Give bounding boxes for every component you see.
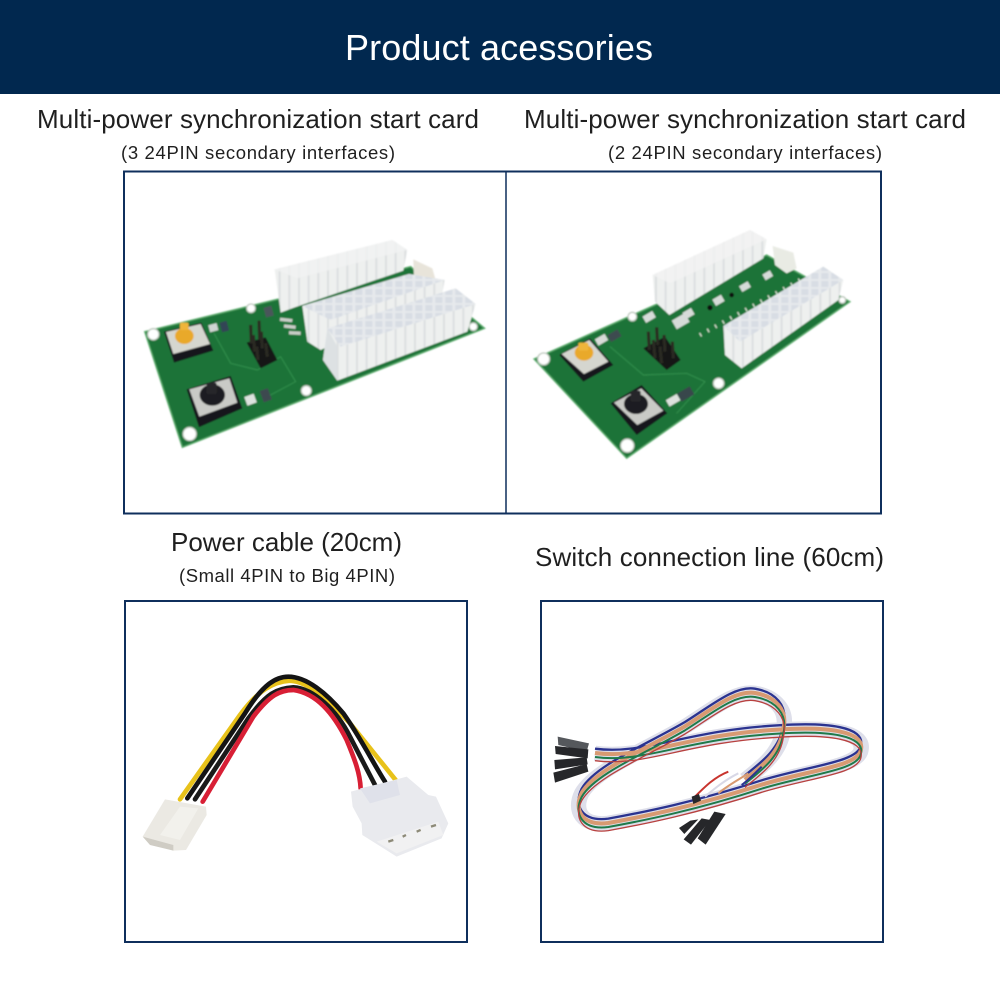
bottom dupont connectors [679, 794, 726, 845]
black wire rear [187, 677, 385, 798]
heading: power cable: (Small 4PIN to Big 4PIN) [179, 565, 395, 586]
panel: power cable frame [125, 601, 467, 942]
mounting holes [538, 353, 550, 365]
heading: 3 24PIN card: Multi-power synchronization start card [37, 104, 479, 134]
SMD area [642, 270, 773, 329]
mounting holes [148, 329, 159, 340]
black reset button [611, 385, 667, 435]
connector 1 [275, 240, 407, 313]
black reset button [187, 376, 242, 427]
yellow wire [180, 681, 396, 799]
SMD parts [595, 334, 608, 346]
heading: power cable: Power cable (20cm) [171, 527, 402, 557]
heading: 2 24PIN card: Multi-power synchronization start card [524, 104, 966, 134]
SMD parts [208, 323, 218, 332]
pin header [643, 337, 681, 370]
connector 2 [723, 267, 843, 368]
pin header [247, 337, 277, 368]
heading: 2 24PIN card [524, 104, 966, 163]
ribbon [579, 688, 861, 831]
header banner [0, 0, 1000, 94]
heading: 3 24PIN card [37, 104, 479, 163]
heading: power cable [171, 527, 402, 586]
left dupont connectors [553, 737, 589, 783]
panel: switch line frame [541, 601, 883, 942]
small 4-pin connector [773, 246, 797, 273]
panel: boards frame [124, 172, 881, 514]
heading: 3 24PIN card: (3 24PIN secondary interfaces) [121, 142, 395, 163]
connector 1 [653, 230, 767, 315]
heading: 2 24PIN card: (2 24PIN secondary interfaces) [608, 142, 882, 163]
yellow power button [164, 323, 213, 363]
black wire front [195, 687, 375, 799]
connector 3 [323, 288, 476, 381]
product photo: switch connection line [553, 688, 861, 845]
large molex connector [351, 777, 448, 857]
connector 2 [302, 274, 445, 350]
product photo: card with two connectors [534, 230, 850, 458]
small connector [143, 799, 207, 851]
yellow power button [559, 338, 613, 382]
split wires [695, 767, 762, 797]
red wire [203, 690, 361, 802]
small 4-pin connector [413, 259, 436, 280]
heading: switch line: Switch connection line (60cm) [535, 542, 884, 572]
product photo: card with three connectors [145, 240, 485, 447]
title: Product acessories [345, 27, 653, 68]
product photo: power cable [143, 677, 448, 857]
